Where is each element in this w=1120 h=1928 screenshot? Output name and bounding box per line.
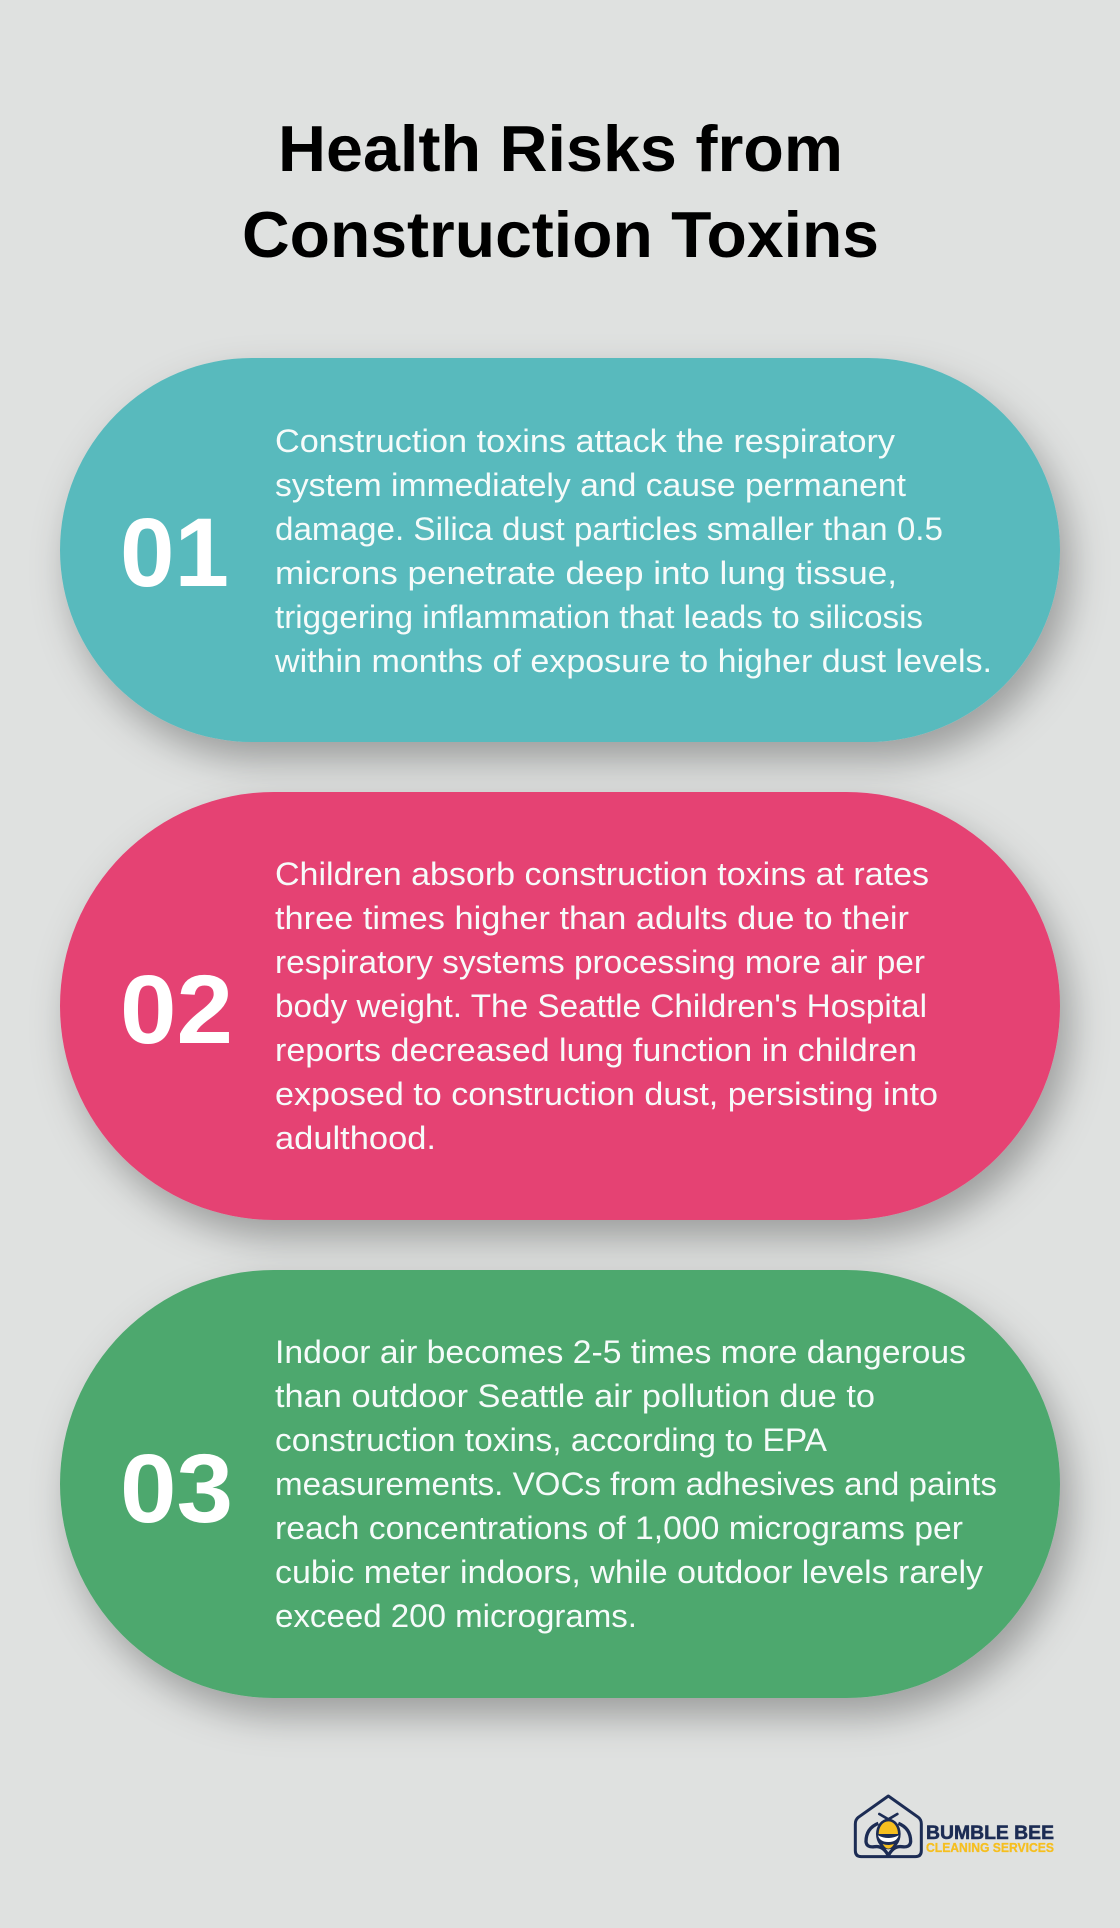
text block 03: cubic meter indoors, while outdoor levels rarely xyxy=(275,1554,984,1590)
text block 02: exposed to construction dust, persisting into xyxy=(275,1076,938,1112)
text block 01: microns penetrate deep into lung tissue, xyxy=(275,555,897,591)
panel: 01 respiratory damage xyxy=(60,358,1060,742)
panel: 03 indoor air xyxy=(60,1270,1060,1698)
text block 01: damage. Silica dust particles smaller than 0.5 xyxy=(275,511,943,547)
text block 02 xyxy=(275,856,938,1156)
text block 02: respiratory systems processing more air per xyxy=(275,944,925,980)
text block 03: construction toxins, according to EPA xyxy=(275,1422,827,1458)
text block 01: system immediately and cause permanent xyxy=(275,467,906,503)
text block 01: within months of exposure to higher dust levels. xyxy=(274,643,992,679)
text block 02: body weight. The Seattle Children's Hospital xyxy=(275,988,927,1024)
text block 02: Children absorb construction toxins at rates xyxy=(275,856,929,892)
text block 03 xyxy=(275,1334,997,1634)
logo text: BUMBLE BEE xyxy=(926,1823,1054,1844)
text block 02: reports decreased lung function in children xyxy=(275,1032,917,1068)
icon: bee in house xyxy=(855,1796,921,1857)
text block 03: exceed 200 micrograms. xyxy=(275,1598,637,1634)
text block 01: Construction toxins attack the respiratory xyxy=(275,423,896,459)
text block 03: than outdoor Seattle air pollution due to xyxy=(275,1378,875,1414)
logo: Bumble Bee Cleaning Services xyxy=(855,1796,1054,1857)
title: Health Risks from xyxy=(278,112,843,185)
number 01: 01 xyxy=(120,498,229,607)
text block 02: three times higher than adults due to their xyxy=(275,900,909,936)
title xyxy=(242,112,879,271)
number 02: 02 xyxy=(120,955,233,1064)
text block 03: Indoor air becomes 2-5 times more dangerous xyxy=(275,1334,966,1370)
text block 02: adulthood. xyxy=(275,1120,436,1156)
title: Construction Toxins xyxy=(242,198,879,271)
logo: Bumble Bee Cleaning Services: CLEANING SERVICES xyxy=(926,1841,1054,1855)
number 03: 03 xyxy=(120,1434,233,1543)
text block 03: measurements. VOCs from adhesives and paints xyxy=(275,1466,997,1502)
text block 01: triggering inflammation that leads to silicosis xyxy=(275,599,923,635)
panel: 02 children xyxy=(60,792,1060,1220)
text block 01 xyxy=(274,423,992,679)
text block 03: reach concentrations of 1,000 micrograms per xyxy=(275,1510,963,1546)
